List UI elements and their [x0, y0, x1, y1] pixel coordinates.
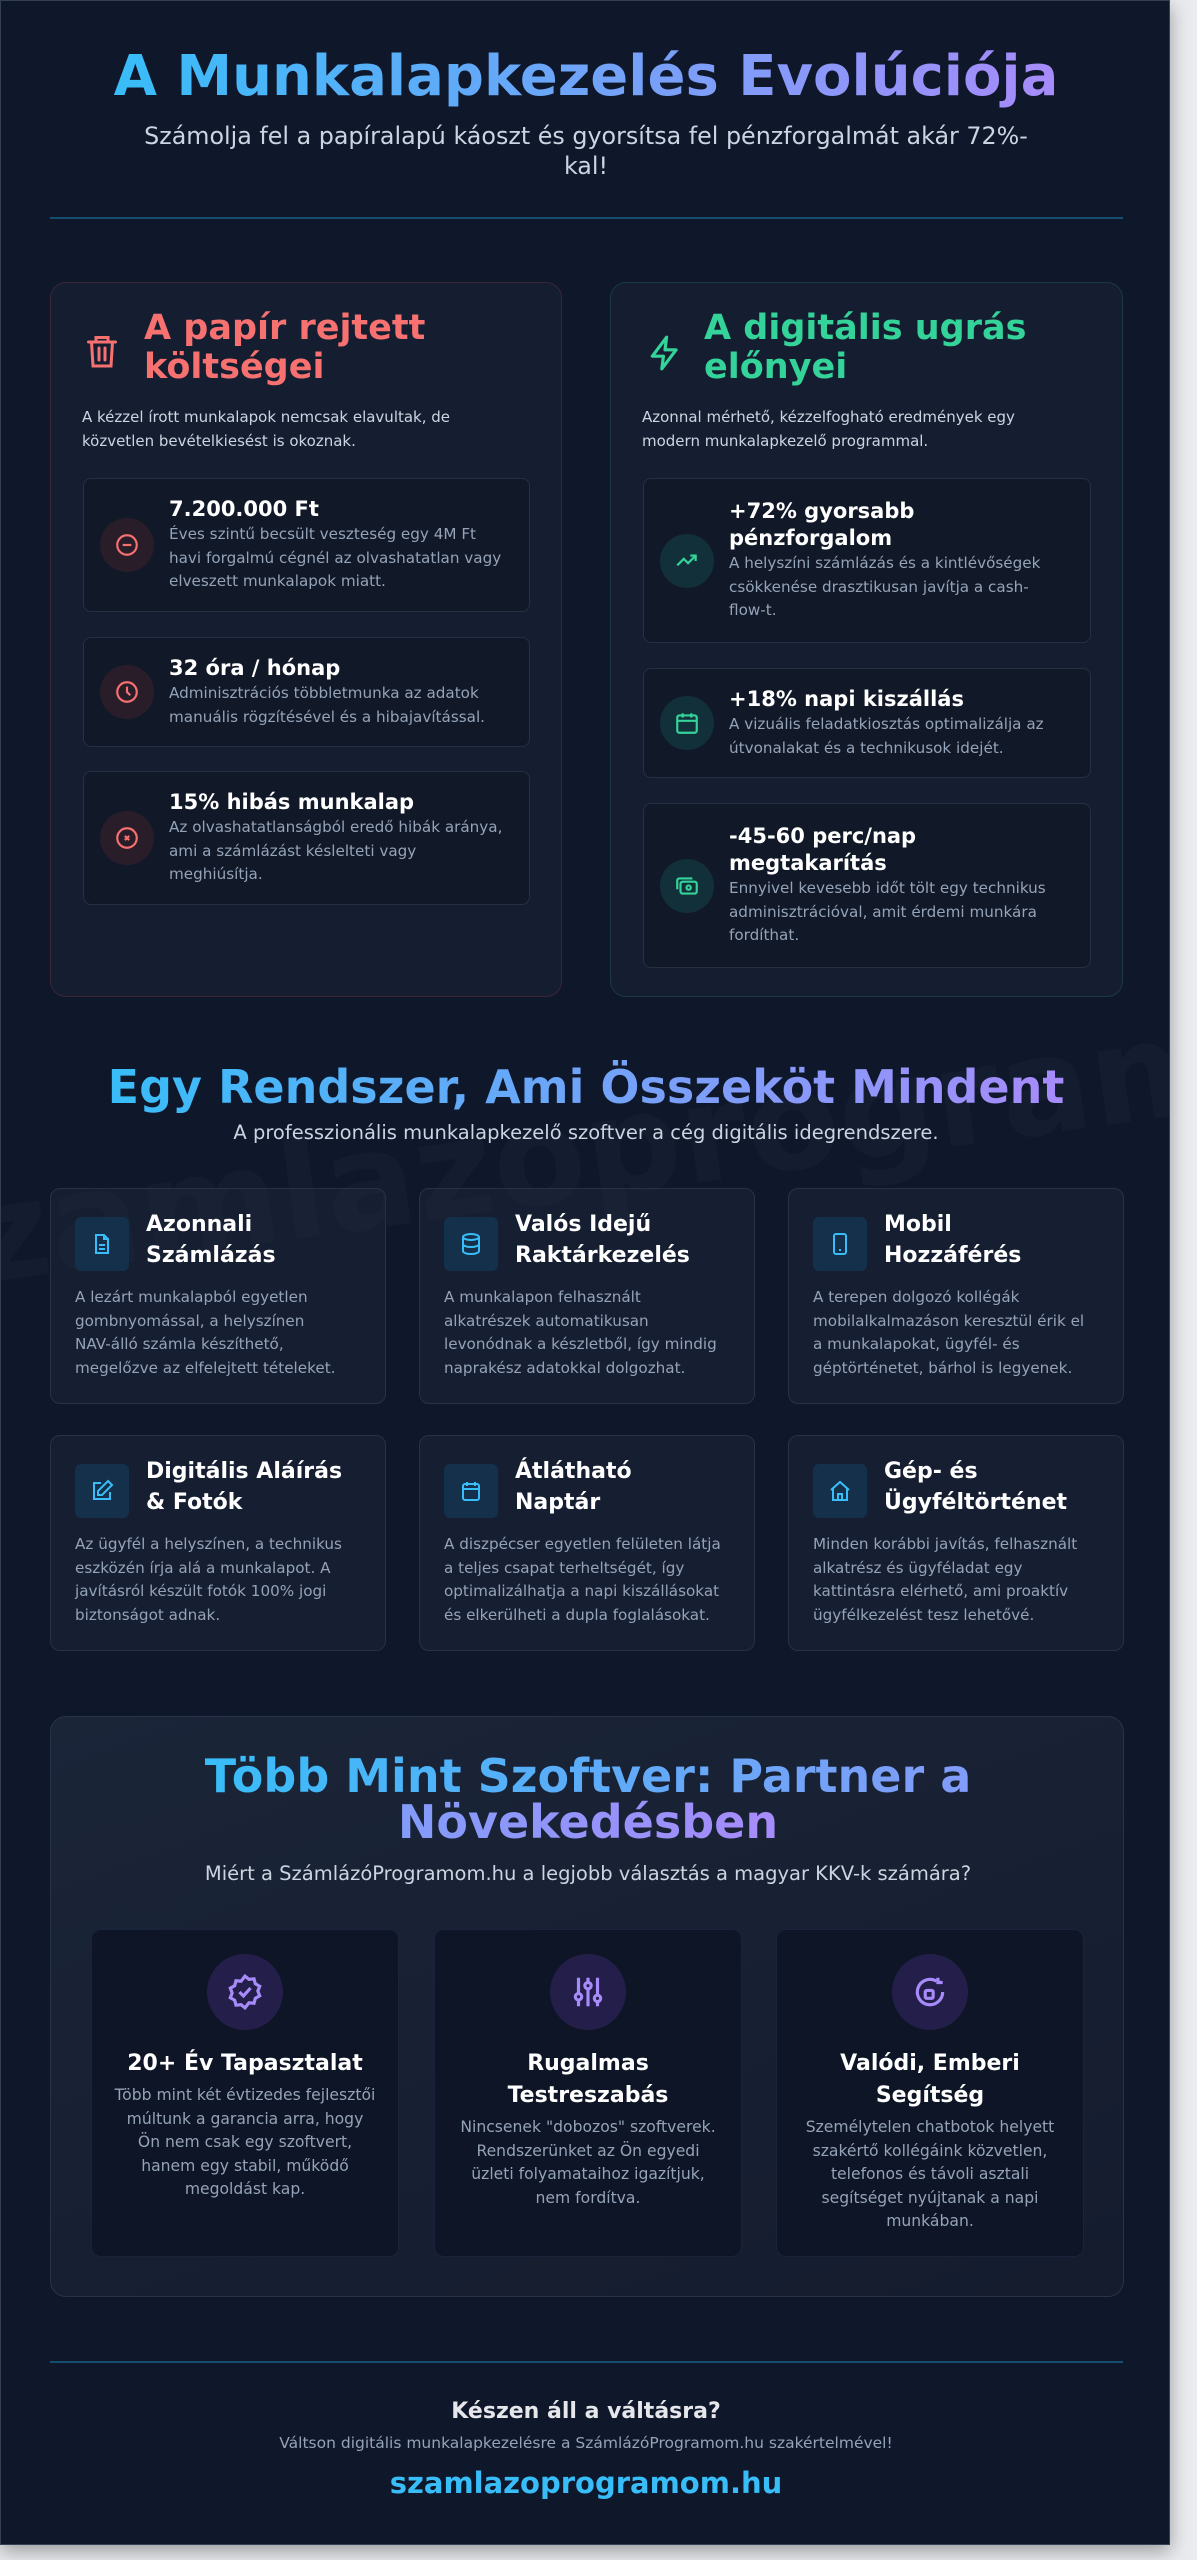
feature: history: kattintásra elérhető, ami proaktív: [813, 1582, 1068, 1600]
feature: invoicing: gombnyomással, a helyszínen: [75, 1312, 304, 1330]
stat: +18%: A vizuális feladatkiosztás optimalizálja az: [729, 715, 1044, 733]
feature: mobile: mobilalkalmazáson keresztül érik el: [813, 1312, 1084, 1330]
subtitle: Miért a SzámlázóProgramom.hu a legjobb választás a magyar KKV-k számára?: [205, 1862, 971, 1885]
stat: -45-60 perc: megtakarítás: [729, 851, 887, 875]
card: flexible: Nincsenek "dobozos" szoftverek.: [460, 2118, 716, 2136]
feature: calendar: [419, 1435, 755, 1651]
card: flexible: [434, 1929, 742, 2257]
card: experience: Ön nem csak egy szoftvert,: [138, 2133, 352, 2151]
stat: 32 óra: Adminisztrációs többletmunka az adatok: [169, 684, 479, 702]
feature: calendar: optimalizálhatja a napi kiszállásokat: [444, 1582, 719, 1600]
section 2 subtitle: A professzionális munkalapkezelő szoftver a cég digitális idegrendszere.: [233, 1121, 939, 1144]
icon: badge: [207, 1954, 283, 2030]
stat: +72%: pénzforgalom: [729, 526, 892, 550]
card: experience: hanem egy stabil, működő: [141, 2156, 349, 2174]
intro text: közvetlen bevételkiesést is okoznak.: [82, 432, 356, 450]
stat: 7.200.000: 7.200.000 Ft: [169, 497, 319, 521]
stat: 15%: Az olvashatatlanságból eredő hibák aránya,: [169, 818, 502, 836]
heading: [144, 308, 425, 387]
stat: +72%: flow-t.: [729, 601, 777, 619]
stat: +72%: +72% gyorsabb: [729, 499, 914, 523]
footer CTA: [279, 2399, 893, 2500]
intro text: [82, 408, 450, 450]
icon: sliders: [550, 1954, 626, 2030]
stat: 32 óra: 32 óra / hónap: [169, 656, 340, 680]
panel: paper costs: [50, 282, 562, 997]
heading: Növekedésben: [398, 1795, 778, 1849]
heading: költségei: [144, 347, 324, 387]
footer CTA: Váltson digitális munkalapkezelésre a SzámlázóProgramom.hu szakértelmével!: [279, 2434, 893, 2452]
subtitle: Számolja fel a papíralapú káoszt és gyorsítsa fel pénzforgalmát akár 72%-: [144, 122, 1028, 150]
feature: history: ügyfélkezelést tesz lehetővé.: [813, 1606, 1034, 1624]
card: flexible: Rugalmas Testreszabás: [508, 2051, 668, 2108]
heading: [704, 308, 1026, 387]
stat: +18%: útvonalakat és a technikusok idejét.: [729, 738, 1004, 756]
panel: partner: [50, 1716, 1124, 2297]
icon: support: [892, 1954, 968, 2030]
feature: invoicing: megelőzve az elfelejtett tételeket.: [75, 1358, 336, 1376]
stat: 15%: meghiúsítja.: [169, 865, 263, 883]
feature: inventory: A munkalapon felhasznált: [444, 1288, 641, 1306]
feature: inventory: alkatrészek automatikusan: [444, 1312, 649, 1330]
stat: -45-60 perc: fordíthat.: [729, 926, 799, 944]
section 2 heading: Egy Rendszer, Ami Összeköt Mindent: [108, 1060, 1064, 1114]
card: support: Valódi, Emberi Segítség: [840, 2051, 1020, 2108]
icon: document: [75, 1217, 129, 1271]
stat: +18%: +18% napi kiszállás: [729, 687, 964, 711]
feature: inventory: naprakész adatokkal dolgozhat.: [444, 1358, 685, 1376]
card: experience: 20+ Év Tapasztalat: [127, 2051, 363, 2076]
intro text: modern munkalapkezelő programmal.: [642, 432, 928, 450]
card: experience: múltunk a garancia arra, hogy: [127, 2110, 363, 2128]
feature: invoicing: A lezárt munkalapból egyetlen: [75, 1288, 308, 1306]
feature: signature: javításról készült fotók 100% jogi: [75, 1582, 326, 1600]
feature: mobile: Mobil Hozzáférés: [884, 1212, 1021, 1268]
stat: 15%: 15% hibás munkalap: [169, 790, 414, 814]
stat: +72%: csökkenése drasztikusan javítja a cash-: [729, 578, 1029, 596]
footer CTA: szamlazoprogramom.hu: [390, 2466, 782, 2500]
icon: pen: [75, 1464, 129, 1518]
feature: calendar: A diszpécser egyetlen felületen látja: [444, 1535, 721, 1553]
feature: invoicing: [50, 1188, 386, 1404]
feature: invoicing: Azonnali Számlázás: [146, 1212, 276, 1268]
feature: history: Minden korábbi javítás, felhasznált: [813, 1535, 1077, 1553]
stat: -45-60 perc: adminisztrációval, amit érdemi munkára: [729, 903, 1037, 921]
card: support: szakértő kollégáink közvetlen,: [813, 2142, 1047, 2160]
stat: +18%: [643, 668, 1091, 778]
feature: inventory: Valós Idejű Raktárkezelés: [515, 1212, 690, 1268]
stat: 7.200.000: elveszett munkalapok miatt.: [169, 572, 386, 590]
stat: 32 óra: [83, 637, 530, 747]
feature: history: Gép- és Ügyféltörténet: [884, 1459, 1067, 1515]
feature: calendar: Átlátható Naptár: [515, 1459, 632, 1515]
feature: mobile: A terepen dolgozó kollégák: [813, 1288, 1019, 1306]
footer CTA: Készen áll a váltásra?: [451, 2399, 721, 2424]
stat: 7.200.000: havi forgalmú cégnél az olvashatatlan vagy: [169, 549, 501, 567]
feature: history: alkatrész és ügyféladat egy: [813, 1558, 1023, 1576]
heading: Több Mint Szoftver: Partner a: [205, 1749, 971, 1803]
intro text: A kézzel írott munkalapok nemcsak elavultak, de: [82, 408, 450, 426]
card: experience: Több mint két évtizedes fejlesztői: [115, 2086, 375, 2104]
feature: calendar: a teljes csapat terheltségét, így: [444, 1558, 684, 1576]
icon: trash: [87, 336, 117, 368]
stat: 7.200.000: [83, 478, 530, 612]
stat: 15%: [83, 771, 530, 905]
icon: house: [813, 1464, 867, 1518]
feature: signature: Az ügyfél a helyszínen, a technikus: [75, 1535, 342, 1553]
feature: signature: [50, 1435, 386, 1651]
stat: 7.200.000: Éves szintű becsült veszteség egy 4M Ft: [169, 525, 476, 543]
feature: signature: biztonságot adnak.: [75, 1606, 220, 1624]
panel: digital benefits: [610, 282, 1123, 997]
icon: calendar: [444, 1464, 498, 1518]
card: experience: [91, 1929, 399, 2257]
heading: [205, 1749, 971, 1849]
heading: A papír rejtett: [144, 308, 425, 348]
feature: signature: eszközén írja alá a munkalapot. A: [75, 1558, 330, 1576]
feature: signature: Digitális Aláírás & Fotók: [146, 1459, 342, 1515]
card: support: segítséget nyújtanak a napi: [822, 2188, 1038, 2206]
feature: mobile: [788, 1188, 1124, 1404]
card: flexible: üzleti folyamataihoz igazítjuk,: [471, 2165, 705, 2183]
intro text: [642, 408, 1015, 450]
stat: 32 óra: manuális rögzítésével és a hibajavítással.: [169, 708, 485, 726]
card: flexible: nem fordítva.: [536, 2188, 640, 2206]
icon: bolt: [650, 336, 678, 370]
heading: előnyei: [704, 347, 847, 387]
feature: mobile: a munkalapokat, ügyfél- és: [813, 1335, 1020, 1353]
stat: +72%: A helyszíni számlázás és a kintlévőségek: [729, 554, 1040, 572]
card: support: [776, 1929, 1084, 2257]
icon: phone: [813, 1217, 867, 1271]
stat: -45-60 perc: Ennyivel kevesebb időt tölt egy technikus: [729, 879, 1046, 897]
heading: A digitális ugrás: [704, 308, 1026, 348]
feature: inventory: [419, 1188, 755, 1404]
feature: invoicing: NAV-álló számla készíthető,: [75, 1335, 284, 1353]
feature: mobile: géptörténetet, bárhol is legyenek.: [813, 1358, 1072, 1376]
intro text: Azonnal mérhető, kézzelfogható eredmények egy: [642, 408, 1015, 426]
subtitle: [144, 122, 1028, 180]
card: support: Személytelen chatbotok helyett: [806, 2118, 1054, 2136]
feature: history: [788, 1435, 1124, 1651]
stat: 15%: ami a számlázást késlelteti vagy: [169, 842, 416, 860]
stat: +72%: [643, 478, 1091, 643]
card: experience: megoldást kap.: [185, 2180, 305, 2198]
stat: -45-60 perc: [643, 803, 1091, 968]
feature: inventory: levonódnak a készletből, így mindig: [444, 1335, 717, 1353]
feature: calendar: és elkerülheti a dupla foglalásokat.: [444, 1606, 710, 1624]
card: support: munkában.: [886, 2212, 974, 2230]
card: flexible: Rendszerünket az Ön egyedi: [476, 2142, 700, 2160]
subtitle: kal!: [564, 152, 608, 180]
stat: -45-60 perc: -45-60 perc/nap: [729, 824, 916, 848]
card: support: telefonos és távoli asztali: [831, 2165, 1029, 2183]
title: A Munkalapkezelés Evolúciója: [114, 44, 1058, 109]
icon: database: [444, 1217, 498, 1271]
